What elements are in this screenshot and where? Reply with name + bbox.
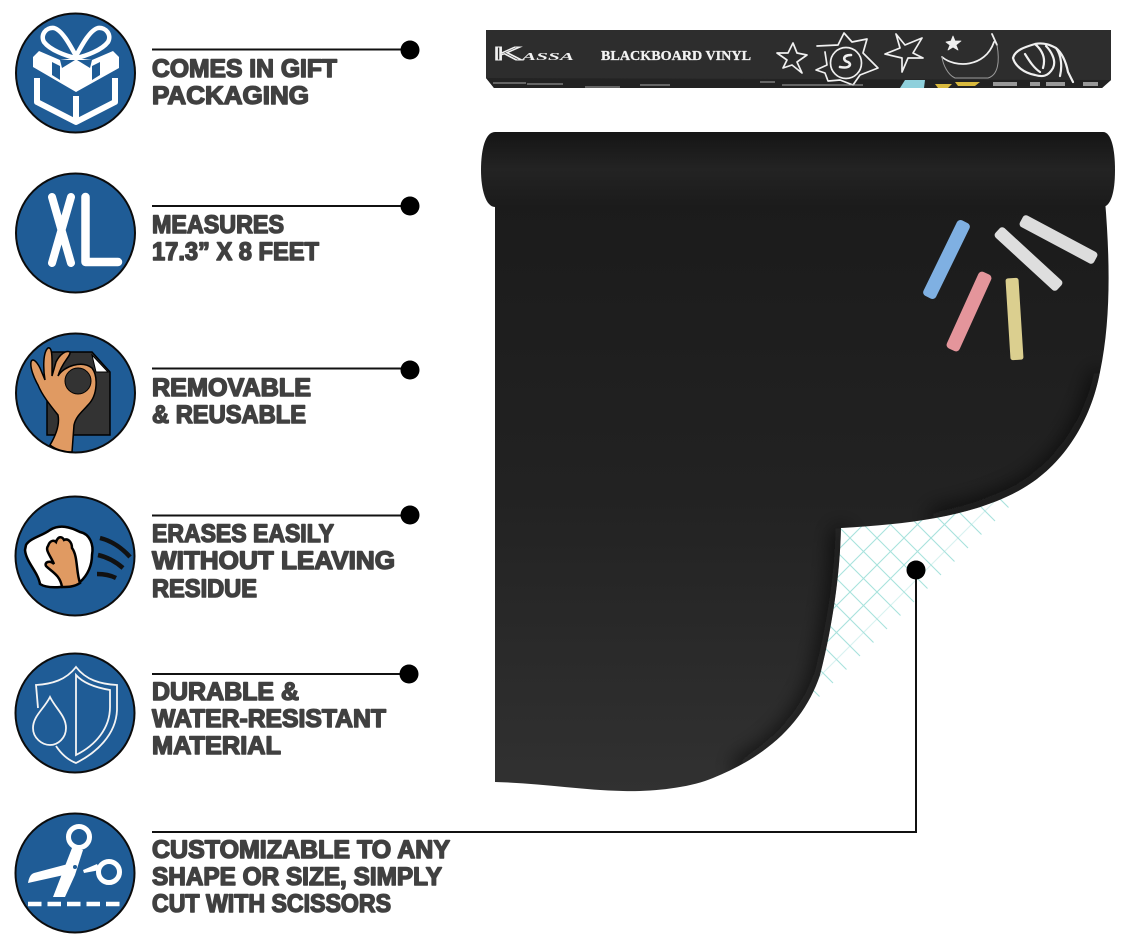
chalk: yellow [1005, 278, 1024, 360]
leader line to sheet backing [152, 560, 926, 832]
label: CUSTOMIZABLE TO ANY [152, 836, 450, 864]
label [152, 55, 337, 110]
leader line [152, 360, 420, 380]
chalk: pink [945, 270, 993, 353]
icon: XL [16, 174, 135, 292]
leader line [152, 196, 420, 216]
vinyl sheet [495, 200, 1109, 791]
roll [481, 132, 1115, 207]
grid backing of the vinyl sheet [814, 499, 1009, 697]
icon: gift box [16, 14, 135, 132]
chalk: blue [922, 219, 971, 300]
label [152, 374, 311, 429]
label: MATERIAL [152, 732, 281, 760]
label [152, 678, 386, 760]
icon: hand wiping with cloth [16, 496, 134, 616]
icon: hand peeling sheet [16, 334, 135, 452]
label: DURABLE & [152, 678, 299, 706]
feature 1: gift packaging [16, 14, 420, 132]
box: brand: ASSA [520, 52, 575, 63]
label: PACKAGING [152, 82, 309, 110]
label: RESIDUE [152, 575, 257, 603]
label [152, 520, 395, 603]
label: COMES IN GIFT [152, 55, 337, 83]
leader line [152, 506, 420, 524]
icon: shield and water drop [16, 654, 134, 772]
box: lower face doodles [493, 80, 1098, 88]
chalk: white short [993, 226, 1064, 292]
label [152, 836, 450, 918]
feature 5: durable [16, 654, 418, 772]
feature 6: customizable [16, 560, 926, 932]
label: REMOVABLE [152, 374, 311, 402]
box: product name: BLACKBOARD VINYL [601, 49, 751, 64]
leader line [152, 40, 420, 60]
box: chalk doodles [777, 33, 1073, 85]
label: WATER-RESISTANT [152, 705, 386, 733]
feature 3: removable [16, 334, 420, 452]
feature 2: size [16, 174, 420, 292]
chalk: white long [1018, 214, 1099, 265]
icon: scissors [16, 814, 134, 932]
box: brand [493, 44, 575, 64]
label: SHAPE OR SIZE, SIMPLY [152, 863, 442, 891]
box: brand: K [493, 44, 522, 64]
label: 17.3” X 8 FEET [152, 238, 319, 266]
product box [486, 30, 1111, 88]
label: & REUSABLE [152, 401, 306, 429]
chalk sticks [922, 214, 1099, 360]
label: CUT WITH SCISSORS [152, 890, 391, 918]
feature 4: erases [16, 496, 420, 616]
label: ERASES EASILY [152, 520, 334, 548]
label: WITHOUT LEAVING [152, 547, 395, 575]
leader line [152, 664, 418, 684]
label [152, 211, 319, 266]
label: MEASURES [152, 211, 284, 239]
